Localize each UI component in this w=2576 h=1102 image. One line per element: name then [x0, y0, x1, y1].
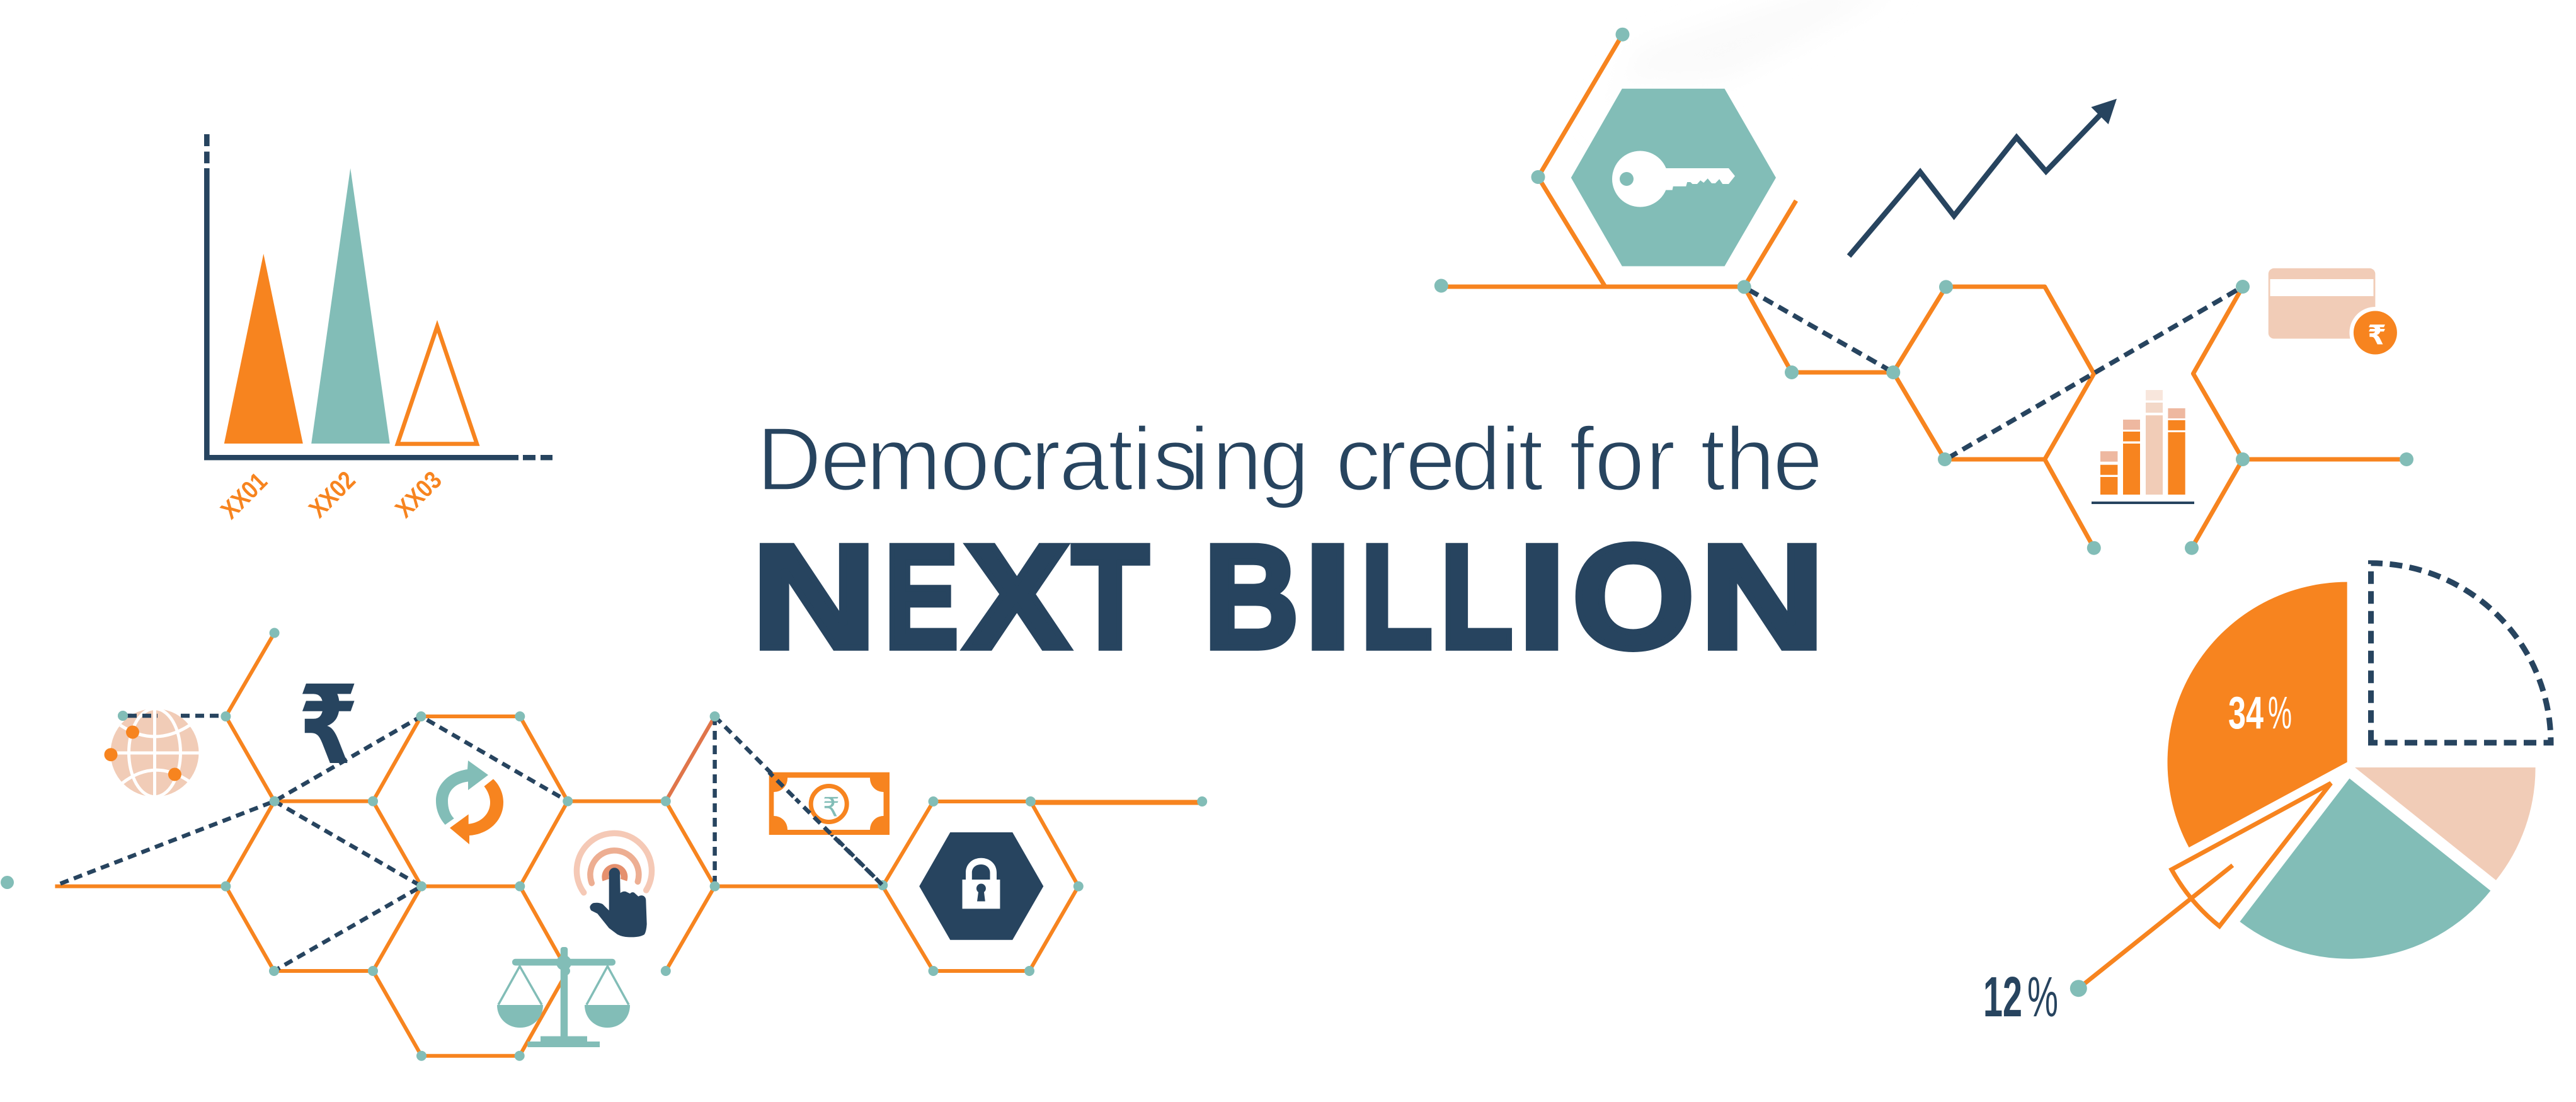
network nodes — [1, 628, 1207, 1061]
icon: key hexagon — [1571, 89, 1776, 267]
icon: balance scale — [497, 947, 630, 1047]
axis labels: XX01 — [215, 468, 273, 524]
arrow: rising trend line — [1849, 99, 2117, 256]
icon: credit card with rupee coin — [2269, 268, 2401, 359]
triangle XX02 — [311, 168, 390, 444]
value: 12%: 12 — [1983, 966, 2022, 1029]
network nodes — [1434, 28, 2413, 555]
title line 2: T — [1072, 514, 1149, 679]
slice: teal — [2240, 779, 2490, 959]
triangle bar chart — [204, 134, 552, 524]
slice: dashed empty — [2371, 563, 2551, 743]
chart axes — [204, 134, 552, 460]
orange hexagon lines — [1441, 35, 2407, 548]
title line 2: L — [1361, 514, 1433, 679]
title line 2: I — [1518, 514, 1566, 679]
leader line — [2070, 865, 2233, 997]
icon: refresh arrows — [436, 760, 503, 844]
dashed navy connectors — [60, 716, 883, 971]
icon: padlock hexagon — [919, 832, 1043, 940]
pie chart — [1983, 563, 2551, 1029]
triangle XX01 — [224, 254, 303, 444]
title line 2: B — [1204, 514, 1299, 679]
triangle XX03 — [398, 326, 477, 444]
slice: peach — [2355, 767, 2536, 880]
value: 34%: % — [2268, 688, 2292, 738]
slice: orange 34% — [2168, 582, 2347, 847]
bottom-left hexagon network — [1, 628, 1207, 1061]
icon: credit card with rupee coin: ₹ — [2367, 320, 2386, 352]
title — [752, 410, 1824, 679]
axis labels: XX02 — [304, 466, 361, 523]
dashed navy connectors — [1749, 287, 2243, 458]
title line 2: N — [1700, 514, 1824, 679]
icon: stacked bar chart — [2092, 390, 2194, 504]
value: 12%: % — [2027, 966, 2058, 1029]
title line 2: L — [1440, 514, 1513, 679]
top-right hexagon network — [1434, 28, 2413, 555]
icon: banknote — [769, 772, 890, 885]
orange hexagon lines — [55, 633, 1202, 1056]
title line 1: Democratising credit for the — [757, 410, 1823, 510]
icon: globe — [105, 708, 199, 797]
title line 2: I — [1304, 514, 1352, 679]
value: 34%: 34 — [2228, 688, 2264, 738]
axis labels — [215, 466, 447, 524]
icon: rupee symbol: ₹ — [298, 662, 358, 789]
icon: touch hand — [576, 833, 651, 937]
icon: banknote: ₹ — [823, 791, 840, 823]
title line 2: N — [752, 514, 876, 679]
title line 2: E — [884, 514, 959, 679]
axis labels: XX03 — [390, 466, 447, 523]
title line 2: X — [965, 514, 1069, 679]
title line 2: O — [1572, 514, 1695, 679]
slice: outlined 12% — [2172, 783, 2331, 926]
